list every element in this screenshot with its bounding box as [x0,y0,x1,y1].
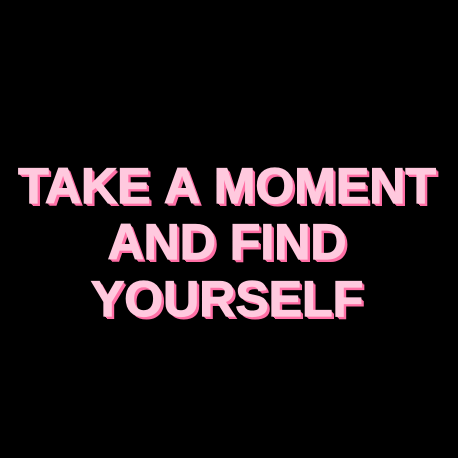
headline line 1: TAKE A MOMENT [18,158,436,214]
headline line 3: YOURSELF [91,271,363,327]
headline text [18,158,438,327]
headline line 2: AND FIND [108,214,346,270]
